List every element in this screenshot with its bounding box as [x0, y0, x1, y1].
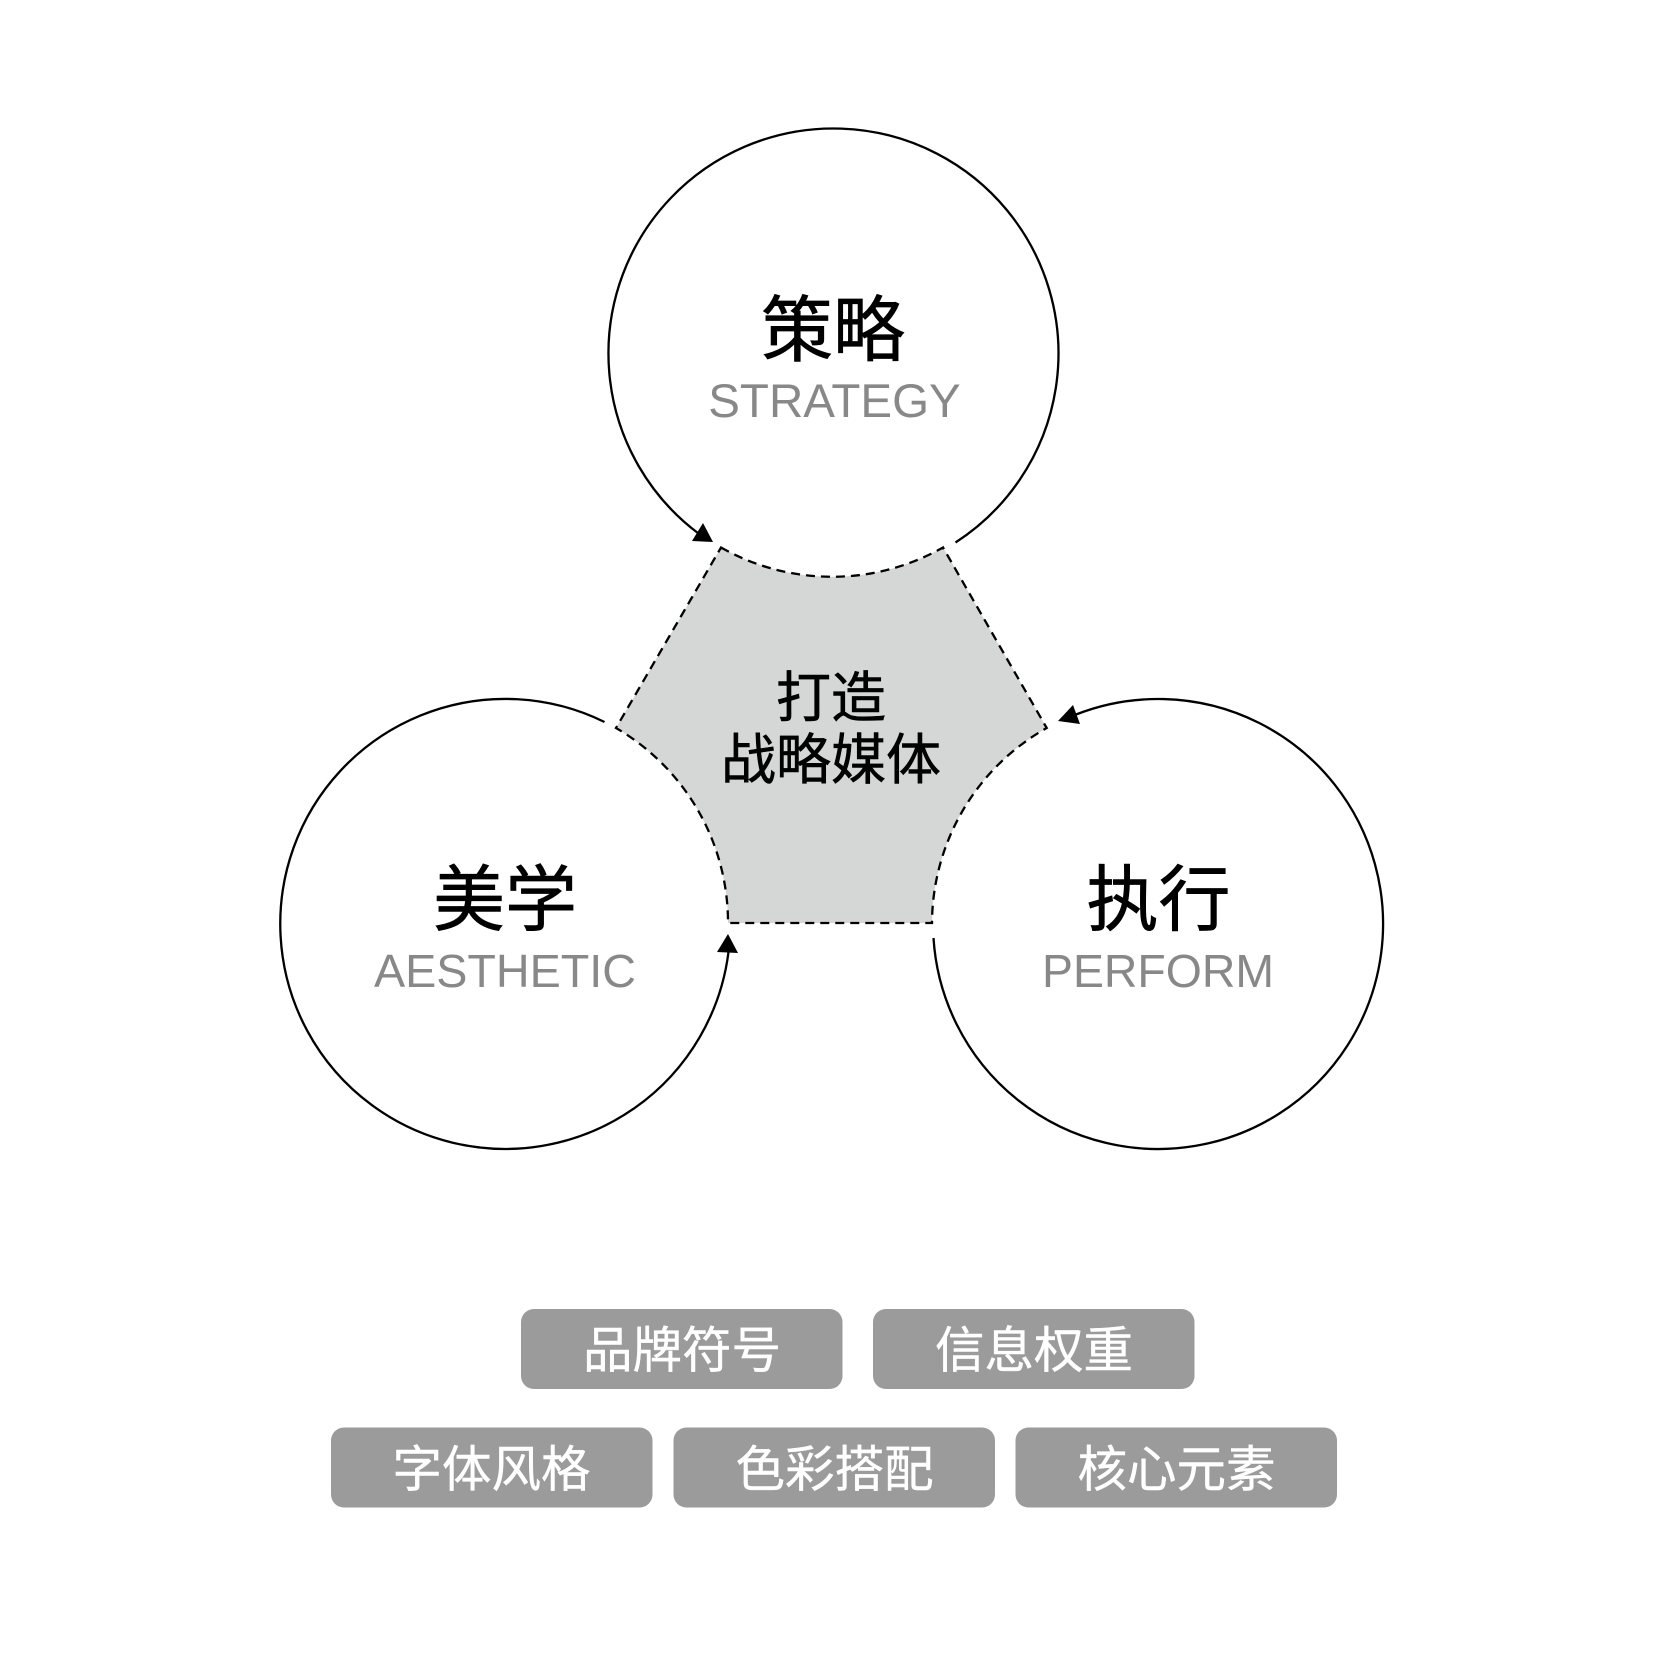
- heading: strategy: 策略: [761, 292, 905, 372]
- tag: colour matching: 色彩搭配: [736, 1442, 934, 1498]
- centre text line 2: 战略媒体: [721, 729, 941, 791]
- tag: colour matching: [674, 1428, 995, 1508]
- centre text: 打造: [776, 667, 886, 729]
- tag: information weight: [873, 1309, 1194, 1389]
- heading: perform: 执行: [1086, 861, 1231, 941]
- panel: aesthetic circle: [280, 699, 738, 1149]
- arrow: into strategy: [692, 523, 713, 542]
- tag: core elements: 核心元素: [1078, 1442, 1276, 1498]
- label: strategy english: STRATEGY: [708, 375, 961, 428]
- label: aesthetic english: AESTHETIC: [374, 945, 636, 997]
- tag: typeface style: 字体风格: [392, 1442, 590, 1498]
- panel: centre shape: [616, 548, 1047, 923]
- panel: strategy circle: [608, 128, 1058, 542]
- arrow: into centre from aesthetic: [717, 934, 738, 953]
- heading: aesthetic: 美学: [433, 861, 577, 941]
- tag: core elements: [1016, 1428, 1337, 1508]
- arrow: into perform: [1058, 705, 1080, 724]
- label: perform english: PERFORM: [1042, 945, 1274, 997]
- tag: typeface style: [331, 1428, 652, 1508]
- tag: information weight: 信息权重: [935, 1324, 1133, 1378]
- panel: perform circle: [934, 699, 1383, 1149]
- tag: brand symbol: 品牌符号: [583, 1324, 781, 1378]
- tag: brand symbol: [521, 1309, 842, 1389]
